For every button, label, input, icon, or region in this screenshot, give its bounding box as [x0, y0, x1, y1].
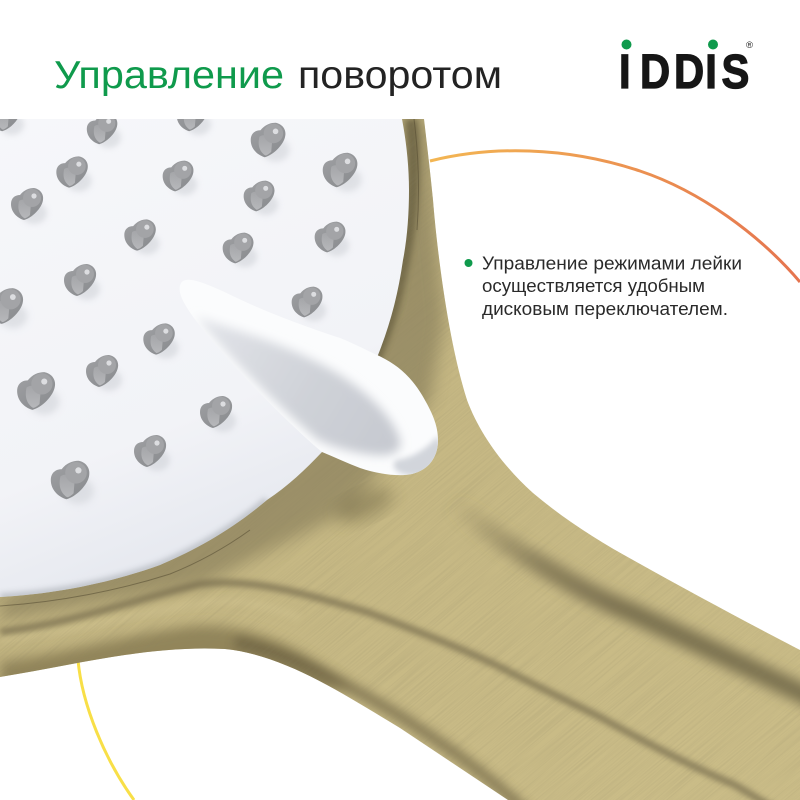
white spray disc [0, 119, 409, 597]
disc bottom edge shadow [0, 500, 267, 597]
title: поворотом [298, 54, 502, 97]
description text: Управление режимами лейки [482, 254, 742, 274]
description text: дисковым переключателем. [482, 299, 728, 319]
title: Управление [54, 54, 284, 97]
description text: осуществляется удобным [482, 276, 705, 296]
spray nozzles [0, 101, 362, 504]
logo: IDDIS: ® [746, 40, 753, 51]
decorative orange arc [430, 151, 800, 282]
rim line around disc [0, 119, 418, 606]
white header band [0, 0, 800, 119]
bullet dot [464, 259, 472, 267]
logo: IDDIS: IDDIS [619, 44, 749, 99]
decorative yellow arc [78, 660, 134, 800]
white rotary dial lever [208, 302, 438, 476]
